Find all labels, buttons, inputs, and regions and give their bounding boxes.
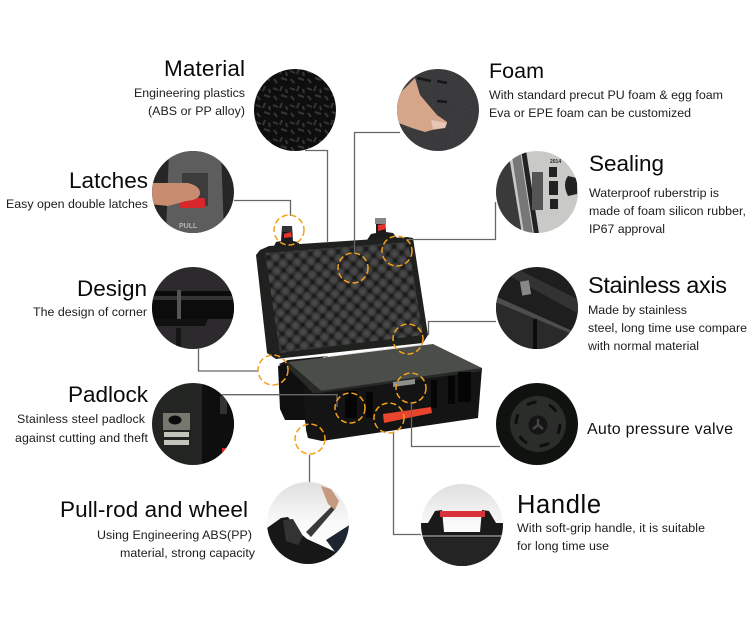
case base front [303,368,482,441]
marker [274,215,304,245]
heading: Sealing [589,151,664,176]
red handle [383,407,432,423]
callout: Padlock [15,381,365,467]
connector [222,395,337,407]
callout: Foam [338,59,723,283]
text block [134,86,245,118]
connector [408,202,496,240]
icon: case corner [150,265,236,351]
right latch [367,218,397,240]
front clasp plate [393,379,415,387]
text block: Made by stainless [588,303,687,317]
icon: hinge axis [495,265,579,351]
case base left side [278,363,315,438]
connector [305,150,328,243]
heading: Foam [489,59,544,83]
icon: plastic pellets [254,69,336,151]
base back and hinge area [279,356,328,392]
marker [258,355,288,385]
text block [97,528,256,560]
text block [489,88,723,120]
callout: Design [33,265,288,385]
text block: against cutting and theft [15,431,149,445]
product photo: open case [256,218,482,441]
base foam top [288,344,482,391]
left latch [273,226,301,248]
marker [295,424,325,454]
text block: (ABS or PP alloy) [148,104,245,118]
text block: The design of corner [33,305,147,319]
case lid [256,237,428,359]
icon: hand in foam [396,68,480,152]
text block: Stainless steel padlock [17,412,146,426]
callout: Auto pressure valve [396,373,733,465]
icon: handle close-up [420,483,504,567]
heading: Material [164,56,245,81]
text block: Waterproof ruberstrip is [589,186,719,200]
text block: for long time use [517,539,609,553]
heading: Auto pressure valve [587,421,733,438]
marker [393,324,423,354]
heading: Design [77,276,147,301]
text block: IP67 approval [589,222,665,236]
text block: Engineering plastics [134,86,245,100]
icon: pressure valve [496,383,578,465]
icon: padlock hasp [150,381,236,467]
base rim [286,362,482,393]
heading: Stainless axis [588,272,727,298]
text block: steel, long time use compare [588,321,747,335]
connector [198,348,258,371]
text block: with normal material [587,339,699,353]
connector [394,432,421,534]
icon: rubber seal: 2014 [550,159,561,165]
text block: With standard precut PU foam & egg foam [489,88,723,102]
marker [374,403,404,433]
icon: rubber seal [495,150,579,234]
marker [382,236,412,266]
connector [428,322,496,335]
connector [234,200,290,216]
marker [396,373,426,403]
callout: Sealing [382,150,746,266]
connector [308,455,310,482]
heading: Latches [69,168,148,193]
text block [15,412,149,445]
callout: Latches [6,150,304,245]
icon: finger on latch: PULL [179,223,198,230]
text block: made of foam silicon rubber, [589,204,746,218]
text block: material, strong capacity [120,546,256,560]
text block: Easy open double latches [6,197,148,211]
text block: Using Engineering ABS(PP) [97,528,252,542]
lid egg foam [265,242,423,353]
icon: pull rod [267,482,349,564]
icon: finger on latch [150,150,236,234]
text block [589,186,746,236]
marker [335,393,365,423]
connector [354,132,400,253]
hinge gap highlight [323,344,423,359]
callout: Material [134,56,336,243]
connector [412,404,500,446]
callout: Handle [374,403,705,567]
heading: Handle [517,491,601,519]
heading: Padlock [68,382,149,407]
text block [587,303,747,353]
clasps on case front [345,372,471,418]
marker [338,253,368,283]
callout: Pull-rod and wheel [60,424,351,567]
text block [517,521,705,553]
callout: Stainless axis [393,265,747,354]
text block: Eva or EPE foam can be customized [489,106,691,120]
text block: With soft-grip handle, it is suitable [517,521,705,535]
heading: Pull-rod and wheel [60,497,248,522]
